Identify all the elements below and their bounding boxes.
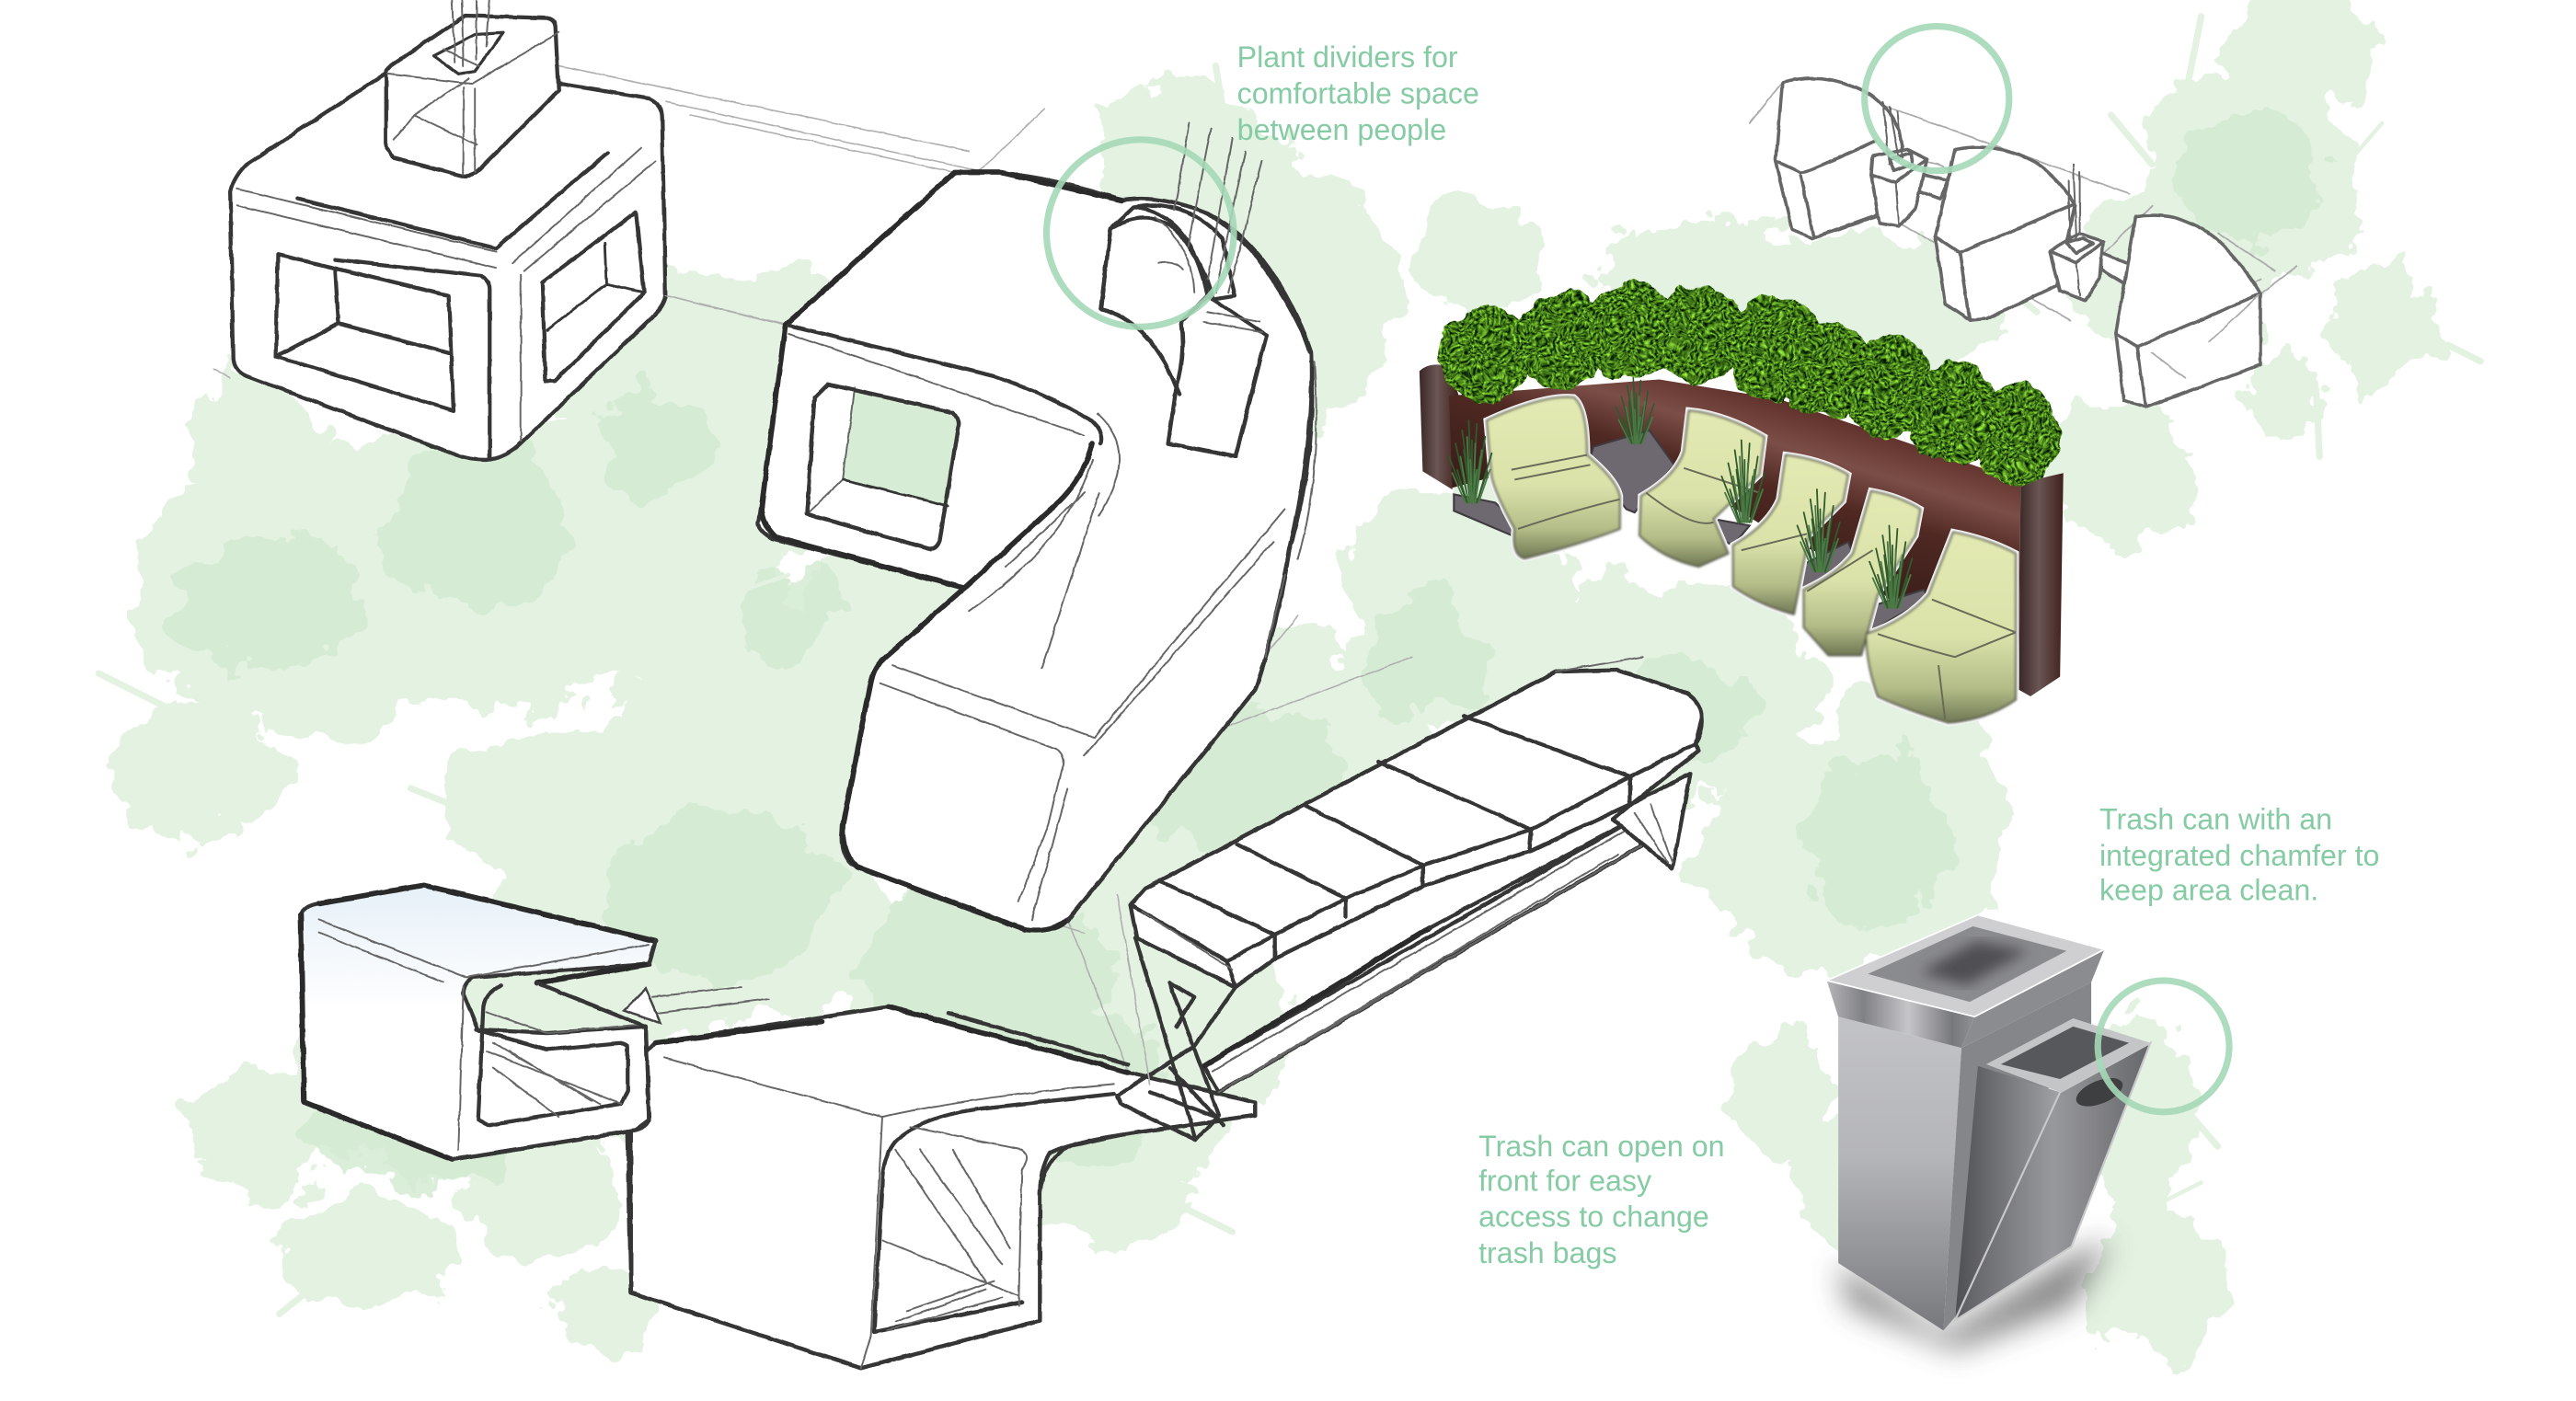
highlight circle: trash chamfer — [2098, 981, 2229, 1112]
callout: plant dividers: comfortable space — [1237, 76, 1479, 109]
seat window — [807, 385, 959, 549]
sketch: cube seat with planter top-left — [213, 0, 985, 460]
door handle — [2073, 1073, 2127, 1112]
wall — [1420, 364, 1459, 489]
sketch: long bench — [1117, 657, 1702, 1140]
door front — [1955, 1043, 2150, 1321]
highlight circle: top-right planter — [1865, 27, 2009, 171]
planter on cube — [386, 0, 558, 176]
rendered trash can — [1827, 915, 2150, 1350]
callout: trash can chamfer: integrated chamfer to — [2099, 839, 2379, 872]
door left panel — [1955, 1066, 2060, 1321]
callout: plant dividers: Plant dividers for — [1237, 40, 1458, 74]
sketch: C-shaped seat block — [301, 885, 769, 1160]
highlight circle: plant divider — [1047, 140, 1234, 327]
callout: trash can front: Trash can open on — [1478, 1130, 1725, 1163]
side tables — [1454, 431, 1928, 634]
callout: trash can front: trash bags — [1478, 1236, 1617, 1269]
callout: trash can front: front for easy — [1478, 1164, 1652, 1197]
body — [1838, 1016, 1961, 1330]
callout: plant dividers: between people — [1237, 113, 1446, 146]
shadow — [1838, 1240, 2111, 1350]
grasses — [1449, 378, 1912, 608]
arrow to seat block — [625, 987, 769, 1023]
callout: trash can chamfer: Trash can with an — [2099, 803, 2332, 836]
sketch: table seat with tongue — [627, 1006, 1255, 1368]
callout: trash can front: access to change — [1478, 1200, 1709, 1234]
hedges — [1437, 281, 2062, 486]
sketch: three seats top-right — [1750, 78, 2296, 408]
callout: trash can chamfer: keep area clean. — [2099, 873, 2318, 906]
seats — [1487, 397, 2016, 723]
door top — [1986, 1018, 2150, 1092]
sketch: curved seat with window — [665, 109, 1413, 1084]
lid rim — [1827, 981, 1974, 1048]
rendered planter seating wall — [1420, 281, 2064, 723]
